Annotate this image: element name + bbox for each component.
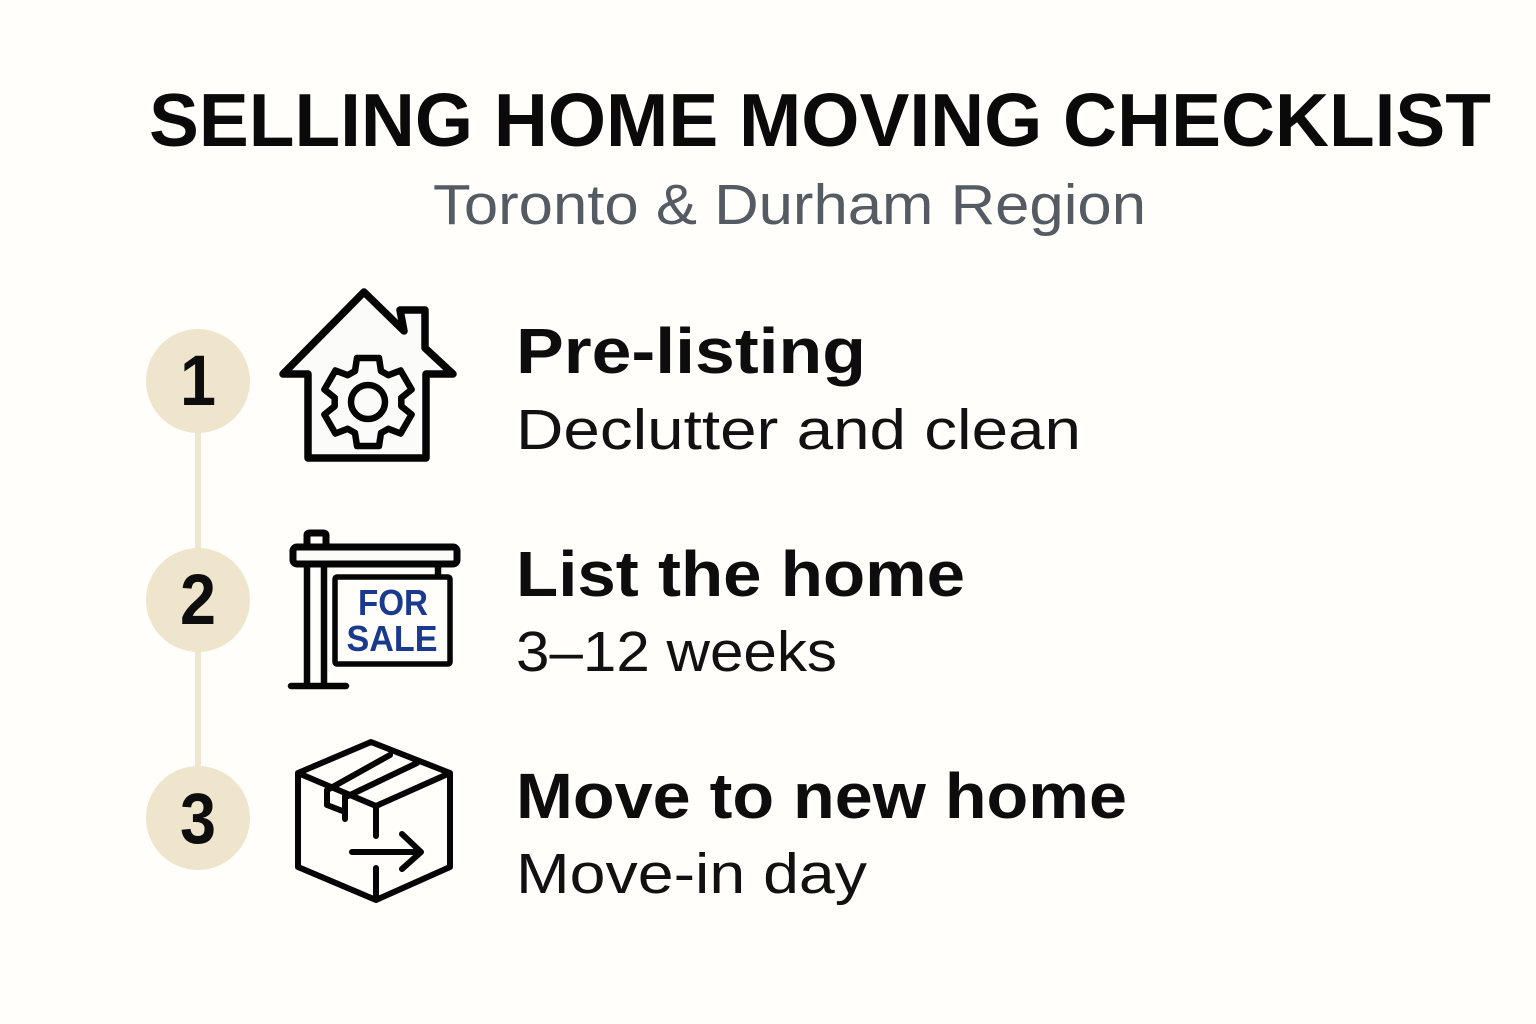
step 1 — [146, 292, 1081, 462]
step 3 heading: Move to new home — [516, 760, 1127, 832]
step 1 number badge: 1 — [180, 342, 216, 421]
step 3 number badge — [146, 766, 250, 870]
subtitle: Toronto & Durham Region — [433, 173, 1146, 237]
step 1 number badge — [146, 329, 250, 433]
timeline connector — [195, 425, 201, 773]
step 2 number badge: 2 — [180, 561, 216, 640]
step 1 description: Declutter and clean — [516, 398, 1081, 462]
step 2 — [146, 533, 965, 686]
step 2 number badge — [146, 548, 250, 652]
icon: moving box with arrow — [298, 742, 450, 900]
icon: house with gear — [283, 292, 453, 458]
step 3 number badge: 3 — [180, 780, 216, 859]
icon: for sale sign — [291, 533, 457, 686]
step 2 heading: List the home — [516, 538, 965, 610]
icon: for sale sign: FOR — [358, 582, 428, 623]
title: SELLING HOME MOVING CHECKLIST — [149, 78, 1491, 162]
step 2 description: 3–12 weeks — [516, 620, 837, 684]
step 3 description: Move-in day — [516, 842, 868, 906]
step 3 — [146, 742, 1127, 906]
step 1 heading: Pre-listing — [516, 315, 866, 387]
icon: for sale sign: SALE — [346, 618, 438, 659]
